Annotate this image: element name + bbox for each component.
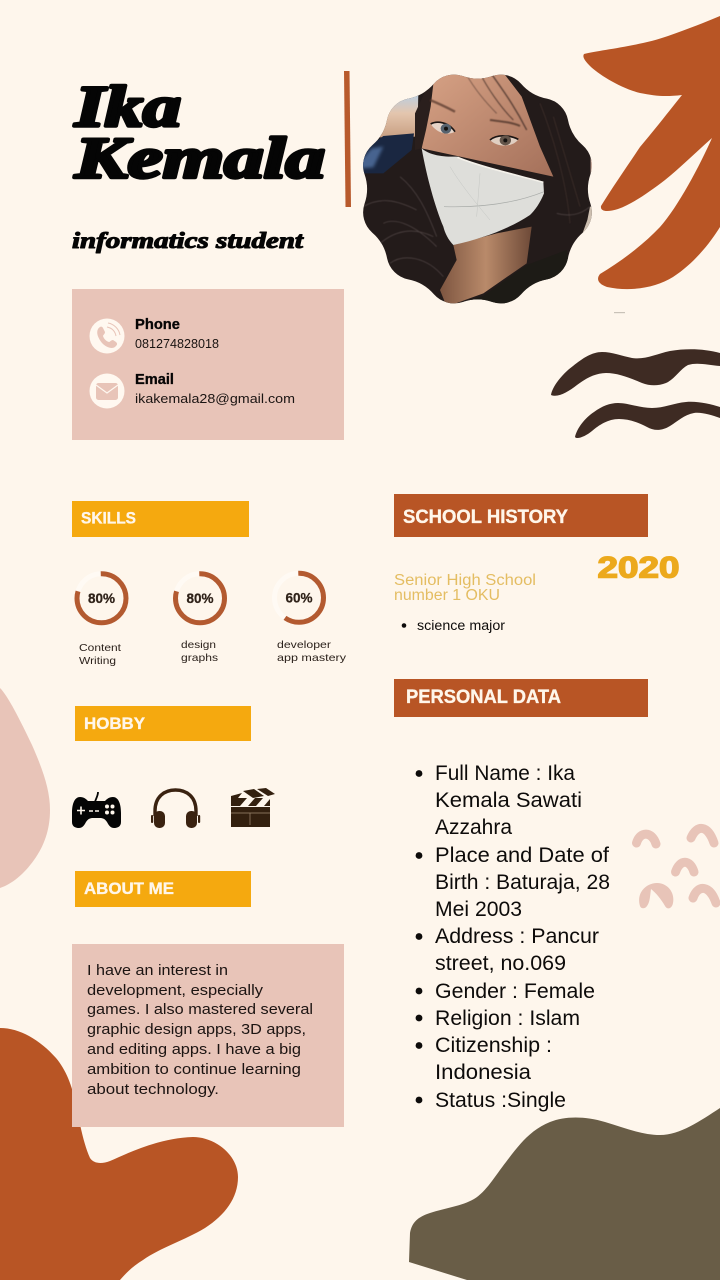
personal data list: street, no.069 bbox=[435, 952, 566, 975]
icon: phone bbox=[90, 318, 124, 354]
personal data list bbox=[416, 762, 610, 1112]
school name bbox=[394, 572, 536, 604]
personal data list: Place and Date of bbox=[435, 844, 609, 867]
personal data list: Azzahra bbox=[435, 816, 512, 839]
heading: personal data bbox=[394, 679, 648, 717]
personal data list: Religion : Islam bbox=[435, 1007, 580, 1030]
icon: game controller bbox=[72, 792, 121, 828]
title: name: Kemala bbox=[74, 126, 325, 190]
icon: film clapperboard bbox=[231, 788, 275, 827]
skill ring: design graphs 80%: graphs bbox=[181, 652, 218, 664]
skill ring: developer app mastery 60%: developer bbox=[277, 639, 332, 651]
phone label: Phone bbox=[135, 317, 180, 333]
skill ring: developer app mastery 60%: 60% bbox=[285, 590, 313, 606]
about paragraph bbox=[87, 962, 313, 1098]
email label: Email bbox=[135, 372, 174, 388]
about paragraph: ambition to continue learning bbox=[87, 1061, 301, 1078]
personal data list: Citizenship : bbox=[435, 1034, 552, 1057]
icon: headphones bbox=[151, 790, 200, 828]
year 2020: 2020 bbox=[598, 552, 680, 584]
about paragraph: games. I also mastered several bbox=[87, 1001, 313, 1018]
personal data list: Address : Pancur bbox=[435, 925, 599, 948]
school name: Senior High School bbox=[394, 572, 536, 589]
subtitle: informatics student bbox=[72, 228, 304, 253]
title: name bbox=[74, 74, 325, 190]
vertical accent rule bbox=[344, 71, 351, 207]
heading: personal data: PERSONAL DATA bbox=[406, 686, 561, 708]
skill ring: design graphs 80% bbox=[176, 574, 224, 664]
skill ring: developer app mastery 60%: app mastery bbox=[277, 652, 347, 664]
school detail bullet: science major bbox=[417, 618, 506, 633]
decoration: dark wavy stroke upper bbox=[551, 349, 720, 396]
skill ring: design graphs 80%: design bbox=[181, 639, 216, 651]
profile photo in scalloped frame bbox=[363, 74, 592, 304]
skill ring: content writing 80%: Writing bbox=[79, 655, 116, 667]
school name: number 1 OKU bbox=[394, 587, 500, 604]
personal data list: Indonesia bbox=[435, 1061, 531, 1084]
heading: skills: SKILLS bbox=[81, 508, 136, 528]
decoration: orange leaf top right bbox=[583, 16, 720, 289]
skill ring: developer app mastery 60% bbox=[274, 573, 347, 664]
about paragraph: and editing apps. I have a big bbox=[87, 1041, 301, 1058]
decoration: pink blob left bbox=[0, 688, 50, 888]
skill ring: content writing 80% bbox=[77, 574, 126, 667]
heading: hobby: HOBBY bbox=[84, 714, 146, 733]
panel: contact bbox=[72, 289, 344, 440]
decoration: olive blob bottom right bbox=[409, 1108, 720, 1280]
decoration: small fleck under leaf bbox=[614, 312, 625, 313]
skill ring: design graphs 80%: 80% bbox=[186, 591, 214, 606]
skill ring: content writing 80%: Content bbox=[79, 642, 121, 654]
personal data list: Birth : Baturaja, 28 bbox=[435, 871, 610, 894]
decoration: dark wavy stroke lower bbox=[575, 402, 720, 438]
about paragraph: graphic design apps, 3D apps, bbox=[87, 1021, 306, 1038]
panel: about me text bbox=[72, 944, 344, 1127]
about paragraph: I have an interest in bbox=[87, 962, 228, 979]
about paragraph: about technology. bbox=[87, 1081, 219, 1098]
decoration: orange blob bottom left bbox=[0, 1028, 238, 1280]
decoration: pink arc marks right bbox=[636, 828, 716, 908]
heading: school history bbox=[394, 494, 648, 537]
skill ring: content writing 80%: 80% bbox=[88, 591, 115, 606]
phone number: 081274828018 bbox=[135, 336, 219, 351]
title: name: Ika bbox=[74, 74, 181, 139]
email address: ikakemala28@gmail.com bbox=[135, 391, 295, 406]
heading: about me bbox=[75, 871, 251, 907]
heading: skills bbox=[72, 501, 249, 537]
heading: hobby bbox=[75, 706, 251, 741]
heading: school history: SCHOOL HISTORY bbox=[403, 506, 568, 528]
heading: about me: ABOUT ME bbox=[84, 879, 174, 898]
eyes bbox=[431, 122, 518, 146]
personal data list: Kemala Sawati bbox=[435, 789, 582, 812]
about paragraph: development, especially bbox=[87, 982, 264, 999]
personal data list: Full Name : Ika bbox=[435, 762, 575, 785]
personal data list: Mei 2003 bbox=[435, 898, 522, 921]
icon: email bbox=[90, 374, 124, 408]
personal data list: Gender : Female bbox=[435, 980, 595, 1003]
personal data list: Status :Single bbox=[435, 1089, 566, 1112]
